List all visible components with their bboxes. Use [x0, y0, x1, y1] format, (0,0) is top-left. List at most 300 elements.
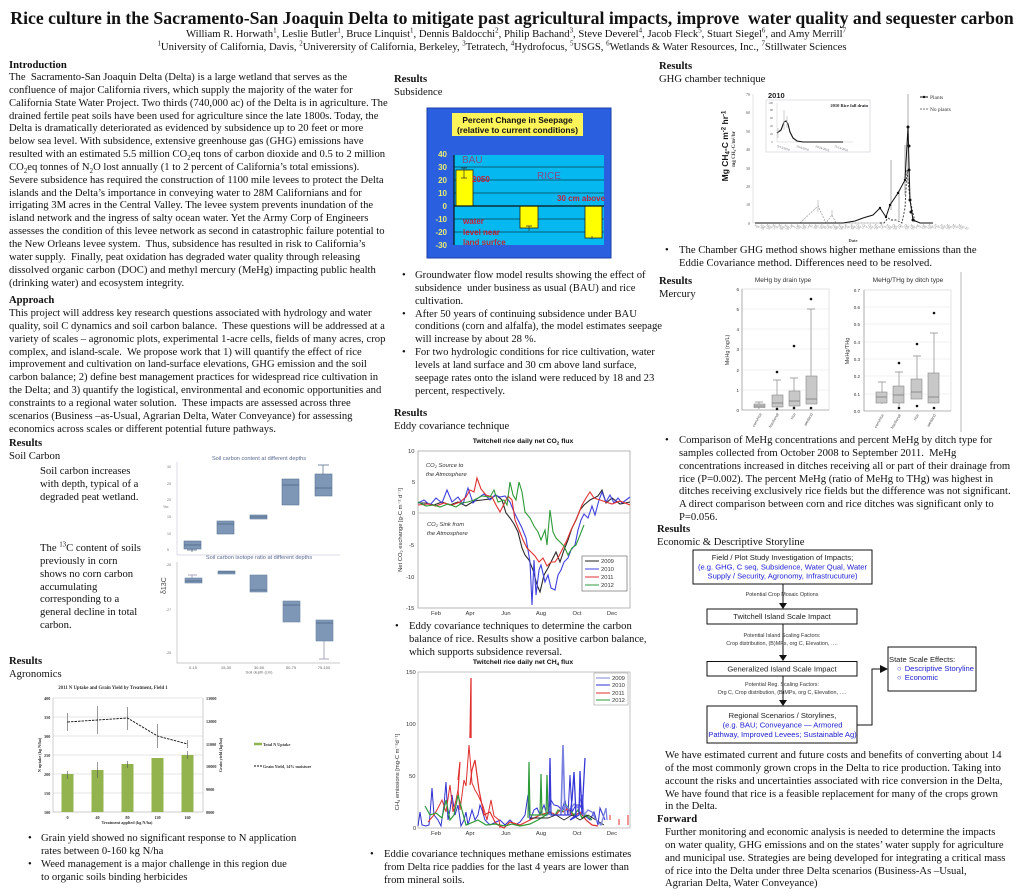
text block: introduction: resulted with an estimated 5.5 million CO2eq tons of carbon dioxide and 0.5 to 2 million: [9, 149, 385, 162]
chart: chamber methane: 50: [746, 129, 750, 134]
text: eddy CO2 finding: balance of rice. Results show a positive carbon balance,: [409, 634, 647, 645]
chart: N uptake and grain yield: 9000: [206, 787, 214, 792]
chart: chamber methane: Feb-1: [928, 223, 937, 230]
chart: CO2 flux: flux: [559, 438, 574, 445]
text: 13C note: carbon.: [40, 620, 72, 631]
chart: MeHg/THg by ditch type: 0.1: [854, 392, 860, 397]
text: mercury finding: ditches receiving exclusively rice fields but the difference was not significant.: [679, 486, 1011, 497]
chart: N uptake and grain yield: 100: [44, 810, 50, 815]
flowchart: economic storyline: Crop distribution, (B)MPs, org C, Elevation, ….: [726, 641, 838, 647]
chart: soil carbon isotope ratio by depth: 0-15: [189, 665, 198, 670]
text block: approach: improvement and cultivation on land-surface elevations, GHG emission and the soil: [9, 359, 367, 370]
chart: CO2 flux: Source to: [437, 463, 464, 469]
chart: soil carbon isotope ratio by depth: 50-75: [286, 665, 297, 670]
text: forward: of rice into the Delta under three Delta scenarios (Business-As –Usual,: [665, 866, 967, 877]
chart: percent change in seepage: 30 cm above: [557, 194, 606, 203]
text: subsidence findings: Groundwater flow model results showing the effect of: [415, 270, 646, 281]
text: 13C note: previously in corn: [40, 556, 117, 567]
text: subsidence findings: seepage rates onto the island were reduced by 18 and 23: [415, 373, 654, 384]
text: mercury finding: Comparison of MeHg concentrations and percent MeHg by ditch type for: [679, 435, 992, 446]
chart: chamber methane: 20: [770, 132, 773, 136]
chart: chamber methane: 2010: [768, 91, 785, 100]
chart: CO2 flux: Oct: [572, 611, 582, 617]
chart: soil carbon content by depth: 25: [167, 482, 171, 486]
chart: CO2 flux: exchange [g-C m⁻² d⁻¹]: [398, 488, 404, 550]
text block: introduction: confluence of major California rivers, which supply the majority of the water for: [9, 85, 353, 96]
flowchart: economic storyline: Regional Scenarios / Storylines,: [729, 711, 836, 720]
flowchart: economic storyline: Potential Island Scaling Factors:: [743, 633, 821, 639]
chart: CO2 flux: Dec: [607, 611, 617, 617]
chart: chamber methane: Aug-1: [820, 223, 830, 230]
chart: MeHg/THg by ditch type: 0.0: [854, 409, 860, 414]
chart: CO2 flux: the Atmosphere: [427, 531, 468, 537]
text block: introduction: assesses the condition of this levee network as second in catastrophic failure potential to: [9, 226, 385, 237]
text block: approach: [9, 308, 385, 435]
chart: chamber methane: Nov-10: [880, 223, 891, 231]
flowchart: economic storyline: (e.g. GHG, C seq, Subsidence, Water Qual, Water: [698, 562, 868, 572]
chart: chamber methane: May-1: [766, 223, 776, 231]
text: 13C note: [40, 541, 141, 631]
text: mercury finding: A direct comparison between corn and rice ditches was significant only to: [679, 499, 994, 510]
heading: results mercury: [659, 276, 696, 300]
text block: approach: constraints to a regional water solution. These impacts are assessed across three: [9, 398, 351, 409]
chart: CH4 flux: 100: [406, 722, 416, 728]
chart: CO2 flux: 2010: [601, 567, 614, 573]
chart: CH4 flux: Twitchell rice daily net CH: [473, 659, 557, 666]
chart: N uptake and grain yield: 2011 N Uptake and Grain Yield by Treatment, Field 1: [58, 686, 168, 691]
chart: chamber methane: 60: [770, 116, 773, 120]
authors: William R. Horwath1, Leslie Butler1, Bruce Linquist1, Dennis Baldocchi2, Philip Bachand3, Steve Deverel4, Jacob Fleck5, Stuart Siegel6, and Amy Merrill7: [186, 26, 846, 40]
text: agronomics findings: [41, 833, 296, 883]
chart: CH4 flux: 4: [557, 662, 560, 666]
text: 13C note: shows no corn carbon: [40, 569, 133, 580]
text: soil carbon note: [40, 466, 138, 503]
chart: soil carbon isotope ratio by depth: -26: [166, 563, 171, 567]
chart: N uptake and grain yield: 80: [125, 815, 130, 820]
chart: percent change in seepage: level near: [463, 228, 500, 237]
flowchart: economic storyline: Org C, Crop distribution, (B)MPs, org C, Elevation, ….: [718, 690, 846, 696]
text block: introduction: California State Water Project. Two thirds (740,000 ac) of the Delta is in agriculture. The: [9, 98, 388, 109]
chart: N uptake and grain yield: 10000: [206, 764, 216, 769]
chart: chamber methane: hr: [720, 115, 730, 127]
chart: chamber methane: Oct-1: [856, 223, 865, 230]
bullet: mercury: •: [665, 435, 669, 446]
bullets: agronomics: •: [28, 859, 32, 870]
text: eddy CO2 finding: which supports subsidence reversal.: [409, 647, 562, 658]
chart: CH4 flux: CH: [395, 802, 401, 810]
chart: chamber methane: Dec-1: [892, 223, 901, 230]
chart: chamber methane: Mar-1: [946, 223, 956, 230]
chart: chamber methane: Mg CH: [720, 154, 730, 181]
chart: chamber methane: No plants: [930, 107, 951, 113]
chart: MeHg/THg by ditch type: 0.2: [854, 374, 860, 379]
text: soil carbon note: with depth, typical of a: [40, 479, 138, 490]
chart: soil carbon isotope ratio by depth: 75-100: [318, 665, 331, 670]
chart: N uptake and grain yield: 40: [95, 815, 100, 820]
chart: chamber methane: Jan-20: [922, 223, 932, 231]
chart: soil carbon isotope ratio by depth: Soil depth (cm): [246, 670, 273, 674]
text: mercury finding: samples collected from October 2008 to September 2011. MeHg: [679, 448, 956, 459]
chart: percent change in seepage: land surfce: [463, 238, 506, 247]
chart: percent change in seepage: 10: [438, 189, 448, 198]
heading: results agronomics: Agronomics: [9, 669, 62, 680]
flowchart: economic storyline: Twitchell Island Scale Impact: [733, 612, 832, 621]
heading: results economic: Results: [657, 524, 690, 535]
chart: percent change in seepage: -30: [435, 241, 448, 250]
text block: introduction: the New Orleans levee system. Thus, subsidence has resulted in risk to California’s: [9, 239, 365, 250]
heading: results economic: Economic & Descriptive Storyline: [657, 537, 804, 548]
bullet: chamber: •: [665, 245, 669, 256]
chart: percent change in seepage: (relative to current conditions): [457, 125, 578, 135]
chart: percent change in seepage: BAU: [462, 155, 483, 166]
chart: CO2 flux: 2: [399, 550, 404, 553]
heading: results agronomics: [9, 656, 62, 680]
text: subsidence findings: [415, 270, 662, 397]
text block: approach: quality, soil C dynamics and soil carbon balance. These questions will be addressed at a: [9, 321, 385, 332]
chart: CO2 flux: 10: [408, 449, 414, 455]
heading: results agronomics: Results: [9, 656, 42, 667]
text block: approach: economics across scales or different potential future pathways.: [9, 424, 276, 435]
chart: percent change in seepage: 0: [443, 202, 448, 211]
text: mercury finding: P=0.056.: [679, 512, 718, 523]
chart: percent change in seepage: 40: [438, 150, 448, 159]
chart: chamber methane: Mar-10: [952, 223, 963, 231]
chart: percent change in seepage: RICE: [537, 171, 561, 182]
chart: chamber methane: Jul-20: [814, 223, 824, 230]
chart: MeHg/THg by ditch type: MeHg/THg by ditch type: [873, 277, 944, 284]
chart: soil carbon content by depth: 30: [167, 465, 171, 469]
chart: CO2 flux: 2: [435, 523, 439, 528]
chart: chamber methane: Dec-20: [904, 223, 915, 231]
chart: N uptake and grain yield: 400: [44, 696, 50, 701]
text block: introduction: irrigating 3M acres in the Central Valley. The levee system prevents inundation of the: [9, 200, 373, 211]
chart: CH4 flux: 50: [409, 774, 415, 780]
chart: CH4 flux: 4: [396, 799, 401, 802]
text: forward: Further monitoring and economic analysis is needed to determine the impacts: [665, 827, 995, 838]
chart: chamber methane: -2: [722, 126, 728, 132]
chart: chamber methane: Jul-10: [808, 223, 818, 230]
text: economics summary: [665, 750, 1002, 812]
chart: CO2 flux: Aug: [536, 611, 546, 617]
chart: MeHg by drain type: 2: [736, 368, 739, 373]
heading: results soil carbon: Soil Carbon: [9, 451, 60, 462]
heading: results eddy covariance: Results: [394, 408, 427, 419]
chart: CH4 flux: Jun: [501, 831, 511, 837]
chart: N uptake and grain yield: 11000: [206, 742, 216, 747]
chart: MeHg by drain type: rice: [789, 411, 797, 420]
chart: CH4 flux: flux: [559, 659, 573, 666]
chart: CO2 flux: -15: [406, 606, 414, 612]
text: subsidence findings: conditions (corn and alfalfa), the model estimates seepage: [415, 321, 662, 332]
chart: N uptake and grain yield: 160: [184, 815, 191, 820]
heading: results subsidence: [394, 74, 442, 98]
text: economics summary: of the most commonly grown crops in the Delta to rice production. Taking into: [665, 763, 1001, 774]
chart: MeHg/THg by ditch type: wetland: [926, 413, 937, 427]
chart: chamber methane: May-10: [772, 223, 784, 231]
flowchart: economic storyline: Potential Crop Mosaic Options: [746, 592, 819, 598]
text: 13C note: accumulating: [40, 582, 97, 593]
chart: N uptake and grain yield: 250: [44, 753, 50, 758]
chart: soil carbon isotope ratio by depth: 30-50: [254, 665, 265, 670]
chart: N uptake and grain yield: 300: [44, 734, 50, 739]
heading: results mercury: Mercury: [659, 289, 696, 300]
chart: MeHg by drain type: 4: [736, 327, 739, 332]
chart: chamber methane: Apr-20: [760, 223, 771, 231]
heading: introduction: Introduction: [9, 60, 67, 71]
chart: CH4 flux: Dec: [607, 831, 617, 837]
flowchart: economic storyline: ○ Economic: [897, 673, 938, 682]
text block: introduction: Delta is dramatically deteriorated as evidenced by subsidence up to 20 feet or more: [9, 123, 363, 134]
chart: percent change in seepage: water: [462, 217, 484, 226]
chart: chamber methane: -C m: [720, 132, 730, 151]
bullet: eddy CO2: •: [395, 621, 399, 632]
chart: chamber methane: 10/24/2010: [815, 144, 830, 153]
text: agronomics findings: to organic soils binding herbicides: [41, 872, 187, 883]
chart: CH4 flux: 2011: [612, 691, 624, 697]
text block: approach: This project will address key research questions associated with hydrology and water: [9, 308, 372, 319]
text: economics summary: account the risks and uncertainties associated with rice conversion in the Delta,: [665, 776, 1002, 787]
chart: CH4 flux: 150: [406, 670, 416, 676]
chart: chamber methane: Feb-10: [934, 223, 945, 231]
chart: CH4 flux: Feb: [431, 831, 441, 837]
chart: chamber methane: 70: [746, 92, 750, 97]
chart: CH4 flux: 2010: [612, 683, 625, 689]
bullets: subsidence: •: [402, 270, 406, 281]
text: economics summary: We have found that rice is a feasible replacement for many of the crops grown: [665, 789, 998, 800]
chart: chamber methane: 20: [746, 184, 750, 189]
flowchart: economic storyline: Potential Reg. Scaling Factors:: [745, 682, 819, 688]
chart: percent change in seepage: 30: [438, 163, 448, 172]
chart: N uptake and grain yield: Grain yield (kg/ha): [218, 737, 223, 772]
flowchart: economic storyline: Supply / Security, Agronomy, Infrastrucuture): [708, 572, 858, 580]
flowchart: economic storyline: Pathway, Improved Levees; Sustainable Ag): [708, 730, 857, 739]
chart: CO2 flux: 5: [412, 480, 415, 486]
heading: results economic: [657, 524, 804, 548]
text: forward: [665, 827, 1005, 889]
heading: results GHG chamber: GHG chamber technique: [659, 74, 765, 85]
heading: results GHG chamber: [659, 61, 765, 85]
chart: percent change in seepage: 20: [438, 176, 448, 185]
bullets: subsidence: •: [402, 309, 406, 320]
chart: CO2 flux: -10: [406, 575, 414, 581]
chart: chamber methane: 100: [768, 101, 773, 105]
text block: introduction: islands and the Delta’s importance in conveying water to 28M Californians and for: [9, 188, 362, 199]
chart: MeHg/THg by ditch type: 0.5: [854, 322, 860, 327]
chart: chamber methane: Jun-1: [784, 223, 793, 230]
chart: MeHg/THg by ditch type: rice: [912, 412, 920, 421]
text block: introduction: island network and the ingress of salty ocean water. Yet the Army Corp of Engineers: [9, 213, 368, 224]
text: chamber finding: Eddie Covariance method. Differences need to be resolved.: [679, 258, 932, 269]
chart: MeHg/THg by ditch type: 0.4: [854, 340, 860, 345]
chart: MeHg by drain type: 6: [736, 287, 739, 292]
text block: introduction: below sea level. With subsidence, extensive greenhouse gas (GHG) emissions have: [9, 136, 364, 147]
chart: soil carbon content by depth: 20: [167, 498, 171, 502]
text: eddy CH4 finding: from mineral soils.: [384, 875, 465, 886]
chart: chamber methane: Feb-20: [940, 223, 951, 231]
heading: results eddy covariance: [394, 408, 509, 432]
chart: CO2 flux: the Atmosphere: [426, 472, 467, 478]
chart: chamber methane: Sep-10: [844, 223, 855, 231]
text: eddy CH4 finding: Eddie covariance techniques methane emissions estimates: [384, 849, 631, 860]
chart: chamber methane: Plants: [930, 95, 943, 101]
chart: N uptake and grain yield: 0: [66, 815, 69, 820]
text block: approach: variety of scales – agronomic plots, experimental 1-acre cells, fields of many acres, crop: [9, 334, 385, 345]
chart: soil carbon isotope ratio by depth: -27: [166, 608, 171, 612]
chart: MeHg by drain type: MeHg by drain type: [755, 277, 812, 284]
chart: chamber methane: 30: [746, 166, 750, 171]
text block: introduction: dissolved organic carbon (DOC) and methyl mercury (MeHg) impacting public health: [9, 265, 376, 276]
chart: chamber methane: Jan-10: [916, 223, 926, 231]
chart: N uptake and grain yield: 350: [44, 715, 50, 720]
bullets: agronomics: [28, 833, 32, 870]
chart: CO2 flux: 0: [412, 511, 415, 517]
chart: soil carbon isotope ratio by depth: 15-30: [221, 665, 232, 670]
chart: CO2 flux: 2: [434, 464, 438, 469]
text: mercury finding: [679, 435, 1011, 523]
text block: introduction: CO2eq tonnes of N2O lost annually (1 to 2 percent of California’s total emissions).: [9, 162, 359, 175]
chart: chamber methane: Oct-20: [868, 223, 879, 231]
chart: chamber methane: Oct-10: [862, 223, 873, 231]
chart: CO2 flux: Jun: [501, 611, 511, 617]
title: Rice culture in the Sacramento-San Joaquin Delta to mitigate past agricultural impacts, improve water quality and sequester carbon: [10, 8, 1014, 28]
chart: N uptake and grain yield: Treatment applied (kg N/ha): [102, 820, 153, 825]
chart: chamber methane: 40: [770, 124, 773, 128]
heading: results eddy covariance: Eddy covariance technique: [394, 421, 509, 432]
chart: percent change in seepage: 2050: [472, 175, 490, 184]
chart: chamber methane: Sep-1: [838, 223, 847, 230]
chart: chamber methane: Jun-10: [790, 223, 800, 231]
chart: soil carbon content by depth: 5: [167, 548, 169, 552]
chart: MeHg by drain type: 1: [736, 388, 739, 393]
heading: approach: Approach: [9, 295, 54, 306]
chart: chamber methane: -1: [722, 110, 728, 116]
text: soil carbon note: degraded peat wetland.: [40, 492, 138, 503]
chart: CH4 flux: 0: [413, 826, 416, 832]
chart: chamber methane: 0: [771, 140, 773, 144]
chart: MeHg/THg by ditch type: 0.3: [854, 357, 860, 362]
heading: results GHG chamber: Results: [659, 61, 692, 72]
chart: CO2 flux: -5: [409, 543, 414, 549]
chart: soil carbon content by depth: 10: [167, 532, 171, 536]
text: agronomics findings: Grain yield showed no significant response to N application: [41, 833, 296, 844]
affiliations: 1University of California, Davis, 2Univerersity of California, Berkeley, 3Tetratech, 4Hydrofocus, 5USGS, 6Wetlands & Water Resources, Inc., 7Stillwater Sciences: [157, 39, 847, 53]
chart: MeHg/THg by ditch type: MeHg/THg: [845, 338, 851, 364]
text: soil carbon note: Soil carbon increases: [40, 466, 130, 477]
text: forward: and municipal use. Strategies are being developed for integrating a critical mass: [665, 853, 1005, 864]
chart: MeHg/THg by ditch type: 0.7: [854, 288, 860, 293]
text: forward: on water quality, GHG emissions and on the states’ water supply for agriculture: [665, 840, 1004, 851]
chart: soil carbon isotope ratio by depth: δ13C: [161, 577, 168, 594]
flowchart: economic storyline: (e.g. BAU; Conveyance — Armored: [723, 720, 842, 730]
flowchart: economic storyline: Generalized Island Scale Impact: [727, 664, 838, 674]
text: subsidence findings: subsidence under business as usual (BAU) and rice: [415, 283, 635, 294]
flowchart: economic storyline: Field / Plot Study Investigation of Impacts;: [712, 553, 853, 562]
chart: N uptake and grain yield: 200: [44, 772, 50, 777]
text block: introduction: Severe subsidence has required the construction of 1100 mile levees to protect the Delta: [9, 175, 384, 186]
chart: chamber methane: 4: [726, 150, 732, 154]
chart: CO2 flux: 2: [557, 440, 560, 446]
text block: approach: scenarios (Business –as-Usual, Agrarian Delta, Water Conveyance) for assessing: [9, 411, 352, 422]
chart: chamber methane: Jul-1: [802, 223, 810, 230]
bullet: eddy CH4: •: [370, 849, 374, 860]
chart: chamber methane: Jun-20: [796, 223, 806, 231]
chart: CH4 flux: Aug: [536, 831, 546, 837]
chart: CO2 flux: CO: [426, 463, 435, 469]
flowchart: economic storyline: ○ Descriptive Storyline: [897, 664, 974, 673]
chart: soil carbon isotope ratio by depth: -28: [166, 651, 171, 655]
chart: CH4 flux: 2012: [612, 698, 625, 704]
chart: chamber methane: 0: [748, 221, 750, 226]
chart: N uptake and grain yield: 12000: [206, 719, 216, 724]
chart: chamber methane: Dec-10: [898, 223, 909, 231]
bullets: subsidence: [402, 270, 406, 358]
chart: MeHg by drain type: MeHg (ng/L): [725, 335, 731, 365]
chart: chamber methane: Aug-20: [832, 223, 843, 231]
chart: N uptake and grain yield: 13000: [206, 696, 216, 701]
bullets: agronomics: •: [28, 833, 32, 844]
text: eddy CH4 finding: [384, 849, 631, 886]
chart: chamber methane: Aug-10: [826, 223, 837, 231]
chart: CH4 flux: 2009: [612, 676, 625, 682]
text: chamber finding: [679, 245, 977, 269]
heading: results mercury: Results: [659, 276, 692, 287]
chart: MeHg/THg by ditch type: fractional: [889, 413, 902, 430]
chart: MeHg by drain type: corn/rice: [751, 411, 763, 428]
text block: approach: the Delta; and 3) quantify the logistical, environmental and economic opportunities and: [9, 385, 381, 396]
chart: chamber methane: Sep-20: [850, 223, 861, 231]
chart: chamber methane: Date: [848, 238, 858, 243]
chart: chamber methane: Nov-1: [874, 223, 884, 230]
chart: MeHg by drain type: fractional: [767, 412, 780, 429]
chart: CO2 flux: Feb: [431, 611, 441, 617]
chart: soil carbon content by depth: 15: [167, 515, 171, 519]
chart: chamber methane: 11/14/2010: [834, 144, 849, 153]
chart: MeHg/THg by ditch type: 0.6: [854, 305, 860, 310]
chart: CH4 flux: Oct: [572, 831, 582, 837]
chart: chamber methane: Jan-1: [910, 223, 919, 230]
text: agronomics findings: rates between 0-160 kg N/ha: [41, 846, 163, 857]
chart: N uptake and grain yield: 120: [154, 815, 161, 820]
chart: CO2 flux: CO: [427, 522, 436, 528]
chart: CO2 flux: Twitchell rice daily net CO: [473, 438, 557, 445]
chart: chamber methane: May-20: [778, 223, 790, 231]
chart: N uptake and grain yield: Total N Uptake: [263, 742, 290, 747]
heading: results soil carbon: Results: [9, 438, 42, 449]
chart: N uptake and grain yield: 8000: [206, 810, 214, 815]
text: subsidence findings: For two hydrologic conditions for rice cultivation, water: [415, 347, 655, 358]
text: mercury finding: rice (P=0.002). The percent MeHg (ratio of MeHg to THg) was highest in: [679, 474, 993, 485]
text: chamber finding: The Chamber GHG method shows higher methane emissions than the: [679, 245, 977, 256]
text block: approach: carbon balance; 2) define best management practices for widespread rice cultivation in: [9, 372, 378, 383]
text: 13C note: The 13C content of soils: [40, 541, 141, 554]
chart: soil carbon content by depth: %c: [163, 504, 169, 509]
chart: chamber methane: 80: [770, 108, 773, 112]
text: agronomics findings: Weed management is a major challenge in this region due: [41, 859, 287, 870]
text: eddy CH4 finding: from Delta rice paddies for the last 4 years are lower than: [384, 862, 629, 873]
chart: CO2 flux: 2011: [601, 575, 613, 581]
chart: percent change in seepage: -20: [435, 228, 448, 237]
heading: results subsidence: Subsidence: [394, 87, 442, 98]
chart: chamber methane: 10/4/2010: [796, 144, 810, 152]
bullets: subsidence: •: [402, 347, 406, 358]
text: eddy CO2 finding: Eddy covariance techniques to determine the carbon: [409, 621, 632, 632]
flowchart: economic storyline: State Scale Effects:: [889, 655, 955, 664]
text: subsidence findings: After 50 years of continuing subsidence under BAU: [415, 309, 637, 320]
text block: introduction: drained fertile peat soils have been used for agriculture since the late 1800s. Today, the: [9, 111, 378, 122]
chart: CO2 flux: Sink from: [438, 522, 464, 528]
chart: chamber methane: 9/13/2010: [777, 144, 791, 152]
chart: chamber methane: 40: [746, 147, 750, 152]
